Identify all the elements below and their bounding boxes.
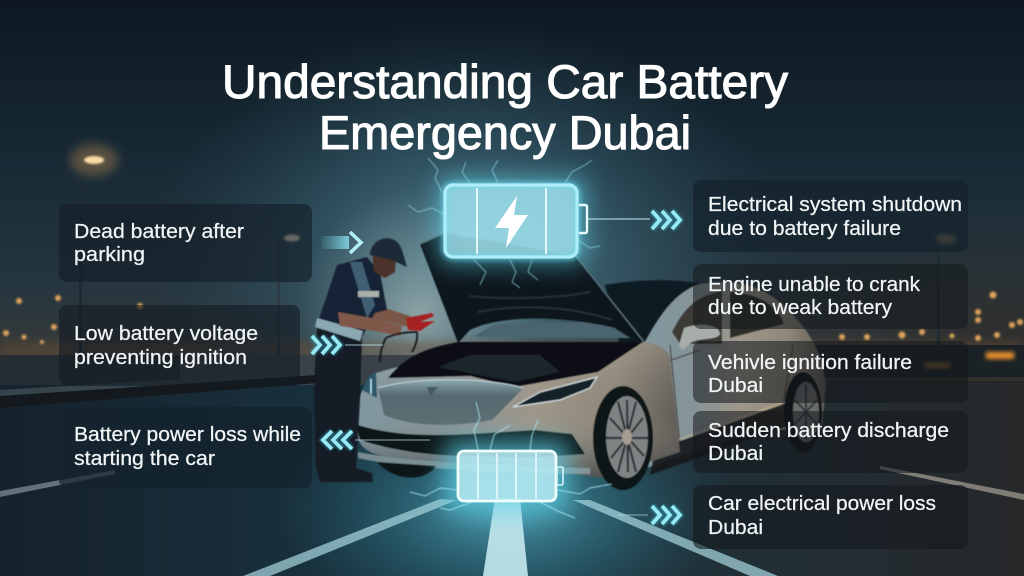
near arm [338,312,402,336]
panel: engine unable to crank: due to weak battery [708,296,893,319]
panel: power loss while starting: starting the car [74,447,215,470]
open hood [420,232,644,343]
rear wheel [784,372,822,452]
panel: sudden discharge [693,411,968,473]
panel: sudden discharge: Sudden battery discharge [708,419,949,442]
car roof and windscreen [605,280,700,345]
torso [317,257,387,337]
panel: ignition failure [693,341,968,403]
panel: electrical system shutdown [693,180,968,252]
arm far [372,305,412,328]
title: Understanding Car Battery [222,55,789,108]
arrow: to low voltage [312,336,383,354]
arrow: to car power loss [618,506,680,524]
side mirror [679,325,720,350]
side window [672,291,722,344]
panel: electrical system shutdown: due to battery failure [708,217,901,240]
rear body [640,282,826,470]
engine bay [388,342,643,387]
legs [314,325,373,482]
panel: power loss while starting [59,407,312,488]
icon: bottom glowing battery [410,402,612,518]
arrow: to dead battery [321,232,361,253]
panel: dead battery: parking [74,243,145,266]
grille panel [378,380,523,425]
arrow: to electrical shutdown [588,211,680,229]
panel: low voltage: preventing ignition [74,346,247,369]
lightning sparks [408,158,600,288]
panel: dead battery: Dead battery after [74,220,244,243]
lightning bolt [495,196,528,248]
panel: electrical power loss: Dubai [708,516,763,539]
right headlight [513,377,597,407]
arrow: to power loss [323,431,430,449]
panel: dead battery [59,204,312,282]
panel: electrical system shutdown: Electrical system shutdown [708,193,962,216]
jumper clamps [406,313,435,331]
car with open hood [355,232,826,490]
front wheel [593,386,653,490]
lower sill shadow [650,403,790,475]
panel: electrical power loss [693,485,968,549]
door lines [657,345,793,445]
windscreen seen under hood [473,322,630,338]
panel: power loss while starting: Battery power loss while [74,423,301,446]
road markings [0,466,1024,576]
panel: low voltage: Low battery voltage [74,322,258,345]
panel: ignition failure: Dubai [708,374,763,397]
icon: top glowing battery [408,158,600,288]
title: Emergency Dubai [319,106,691,159]
left headlight [362,372,377,398]
mechanic with jumper cables [314,238,435,482]
panel: sudden discharge: Dubai [708,442,763,465]
street lamps and distant city lights [3,144,1023,368]
head and cap [372,250,396,278]
title [222,55,789,159]
panel: low voltage [59,305,300,386]
panel: engine unable to crank: Engine unable to crank [708,273,921,296]
panel: engine unable to crank [693,264,968,329]
panel: electrical power loss: Car electrical power loss [708,492,936,515]
lower bumper intake [355,424,585,458]
panel: ignition failure: Vehivle ignition failure [708,351,912,374]
main body [355,342,680,478]
